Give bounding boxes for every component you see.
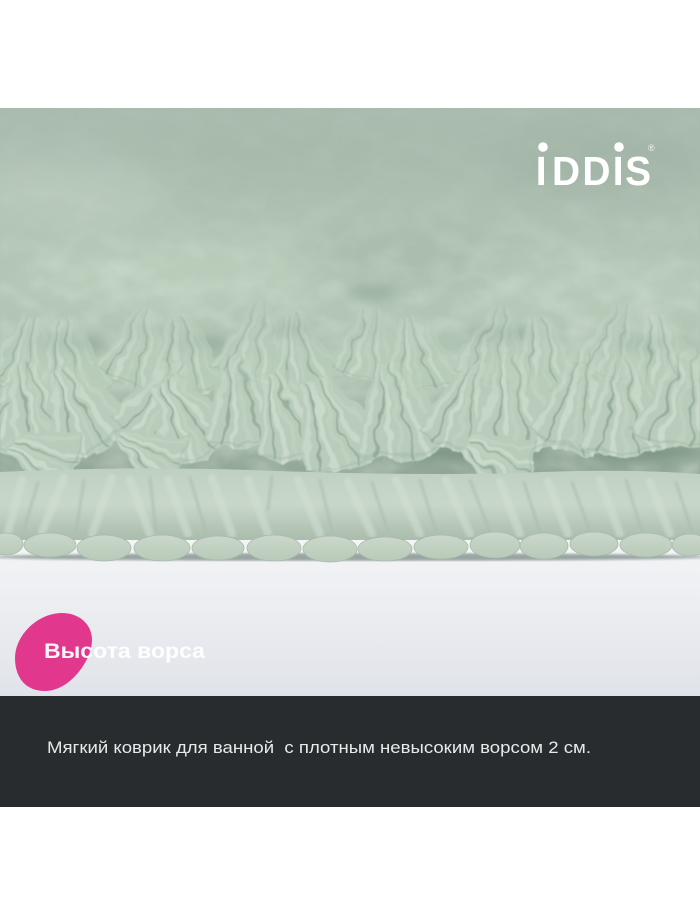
upper row of tufts — [0, 314, 683, 394]
dark pile gaps — [30, 286, 666, 353]
braided bead edging — [0, 532, 700, 562]
pink blob accent — [15, 613, 92, 691]
dark caption band — [0, 696, 700, 807]
logo: IDDIS: IDDIS — [536, 149, 651, 194]
infographic canvas — [0, 108, 700, 807]
lower fringe of tufts — [0, 352, 700, 474]
caption text: Мягкий коврик для ванной с плотным невысоким ворсом 2 см. — [47, 738, 591, 757]
pile texture — [1, 238, 700, 474]
soft pile light and shade — [0, 154, 663, 278]
photo: green bath mat — [0, 108, 700, 562]
logo i dots — [538, 142, 624, 152]
rope edge binding — [0, 468, 700, 540]
bead edge shadow — [0, 553, 700, 561]
deep shadow under fringe — [414, 446, 698, 466]
mat pile base — [0, 108, 700, 483]
heading: Высота ворса — [44, 640, 205, 663]
floor backdrop behind mat — [0, 540, 700, 697]
registered mark: ® — [648, 143, 655, 153]
